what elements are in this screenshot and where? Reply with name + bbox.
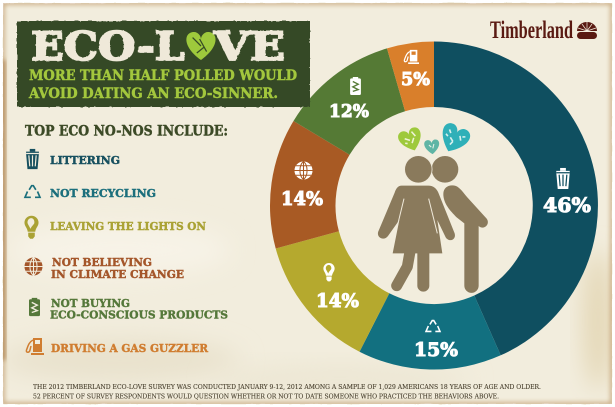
icon: globe white — [294, 161, 313, 180]
label 15%: 15% — [414, 339, 458, 361]
legend heading: TOP ECO NO-NOS INCLUDE: — [25, 124, 228, 140]
title: ECO-LOVE — [31, 24, 285, 70]
icon: battery white — [350, 77, 361, 95]
icon: pump white — [404, 50, 419, 64]
legend item: gas guzzler: DRIVING A GAS GUZZLER — [51, 341, 208, 355]
legend item: littering — [26, 149, 120, 169]
legend item: lights on: LEAVING THE LIGHTS ON — [50, 219, 206, 233]
slice: lights on 14% — [276, 231, 389, 352]
label 14% olive: 14% — [316, 290, 359, 312]
footnote: THE 2012 TIMBERLAND ECO-LOVE SURVEY WAS CONDUCTED JANUARY 9-12, 2012 AMONG A SAMPLE OF 1,029 AMERICANS 18 YEARS OF AGE AND OLDER. — [33, 384, 541, 391]
legend item: eco products — [29, 296, 228, 322]
title panel — [17, 21, 310, 107]
legend item: climate change: IN CLIMATE CHANGE — [51, 267, 184, 281]
footnote — [33, 384, 541, 400]
legend item: littering: LITTERING — [50, 153, 120, 167]
icon: large teal heart — [436, 121, 472, 157]
footnote: 52 PERCENT OF SURVEY RESPONDENTS WOULD QUESTION WHETHER OR NOT TO DATE SOMEONE WHO PRACTICED THE BEHAVIORS ABOVE. — [33, 394, 499, 400]
subtitle — [28, 68, 297, 102]
label 14% rust: 14% — [281, 188, 323, 210]
legend item: lights on — [24, 216, 206, 239]
title: ECO-LOVE: ECO-L — [31, 24, 185, 70]
slice: eco products 12% — [294, 48, 405, 155]
icon: bulb white — [323, 263, 335, 281]
icon: lime heart — [396, 126, 426, 154]
legend — [24, 124, 228, 355]
legend item: eco products: ECO-CONSCIOUS PRODUCTS — [50, 308, 228, 322]
icon: heart in title — [186, 32, 216, 60]
label 46%: 46% — [543, 193, 591, 217]
icon: recycle white — [426, 321, 440, 331]
slice: gas guzzler 5% — [387, 42, 434, 111]
slice: climate change 14% — [270, 121, 350, 248]
legend item: climate change: NOT BELIEVING — [52, 255, 152, 269]
subtitle: AVOID DATING AN ECO-SINNER. — [28, 86, 278, 102]
icon: trash white — [556, 168, 570, 189]
slice: littering 46% — [434, 42, 598, 355]
legend item: eco products: NOT BUYING — [51, 296, 130, 310]
legend item: not recycling: NOT RECYCLING — [50, 186, 156, 200]
donut chart — [270, 42, 598, 370]
Timberland logo: Timberland — [490, 17, 573, 44]
label 12%: 12% — [329, 101, 369, 122]
legend item: climate change — [24, 255, 184, 281]
subtitle: MORE THAN HALF POLLED WOULD — [29, 68, 297, 84]
man figure — [432, 156, 488, 293]
icon: tree logo — [577, 22, 597, 39]
couple illustration — [378, 156, 488, 293]
label 5%: 5% — [401, 69, 430, 90]
legend item: gas guzzler — [26, 338, 208, 355]
woman figure — [378, 156, 455, 286]
slice: not recycling 15% — [360, 293, 501, 370]
title: ECO-LOVE: VE — [213, 24, 285, 70]
icon: small teal heart — [424, 139, 440, 155]
